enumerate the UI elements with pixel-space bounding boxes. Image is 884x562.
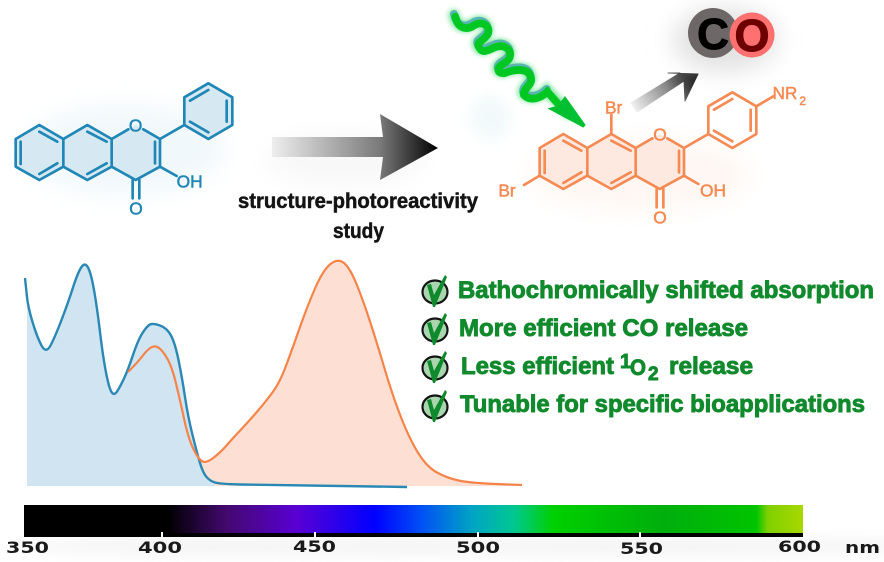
- wavelength axis labels: [6, 537, 880, 558]
- orange molecule: dibromo aminoflavone: NR: [773, 83, 797, 103]
- wavelength axis labels: 500: [456, 538, 500, 557]
- orange molecule: dibromo aminoflavone: Br: [605, 97, 623, 117]
- orange molecule: dibromo aminoflavone: [498, 83, 806, 228]
- blue absorption curve: [25, 265, 407, 487]
- orange molecule: dibromo aminoflavone: 2: [799, 94, 806, 108]
- caption: structure-photoreactivity study: [238, 190, 478, 243]
- benefit: CO release: More efficient CO release: [459, 315, 748, 342]
- benefit: tunable: Tunable for specific bioapplications: [460, 391, 865, 418]
- carbon monoxide molecule: [673, 8, 777, 72]
- blue molecule: hydroxyflavone: O: [129, 199, 143, 219]
- wavelength axis labels: 550: [620, 539, 663, 558]
- benefit: bathochromic shift: Bathochromically shifted absorption: [458, 277, 874, 304]
- orange emission fill: [197, 261, 522, 486]
- orange molecule: dibromo aminoflavone: OH: [700, 181, 726, 201]
- caption: structure-photoreactivity study: structure-photoreactivity: [238, 190, 478, 213]
- check icon 3: [422, 351, 448, 383]
- large gradient reaction arrow: [272, 114, 438, 180]
- wavelength axis labels: nm: [845, 538, 880, 557]
- orange molecule: dibromo aminoflavone: Br: [498, 181, 516, 201]
- caption: structure-photoreactivity study: study: [333, 220, 384, 243]
- benefit: singlet oxygen release: release: [669, 353, 753, 380]
- benefit: singlet oxygen release: Less efficient: [461, 353, 614, 380]
- orange curve: [128, 261, 522, 485]
- soft background glows: [20, 96, 884, 555]
- carbon monoxide molecule: C: [697, 10, 729, 59]
- blue molecule: hydroxyflavone: OH: [177, 171, 203, 191]
- green wavy light arrow: [454, 14, 586, 128]
- wavelength axis labels: 350: [6, 538, 49, 557]
- benefit: singlet oxygen release: 2: [648, 364, 659, 385]
- benefits checklist: [422, 275, 874, 422]
- small gradient arrow to CO: [631, 73, 698, 112]
- wavelength axis labels: 600: [778, 537, 821, 556]
- wavelength axis labels: 400: [138, 538, 182, 557]
- spectra chart: [25, 261, 522, 487]
- carbon monoxide molecule: O: [734, 10, 770, 61]
- wavelength colour bar: [24, 505, 803, 537]
- wavelength axis labels: 450: [293, 537, 336, 556]
- blue molecule: hydroxyflavone: [16, 83, 232, 219]
- check icon 1: [422, 275, 448, 307]
- orange molecule: dibromo aminoflavone: O: [653, 124, 667, 144]
- benefit: singlet oxygen release: O: [630, 355, 646, 380]
- check icon 2: [422, 313, 448, 345]
- check icon 4: [422, 390, 448, 422]
- blue molecule: hydroxyflavone: O: [129, 115, 142, 135]
- blue absorption fill: [27, 265, 215, 486]
- benefit: singlet oxygen release: [461, 351, 753, 385]
- orange molecule: dibromo aminoflavone: O: [653, 208, 667, 228]
- benefit: singlet oxygen release: 1: [620, 351, 631, 373]
